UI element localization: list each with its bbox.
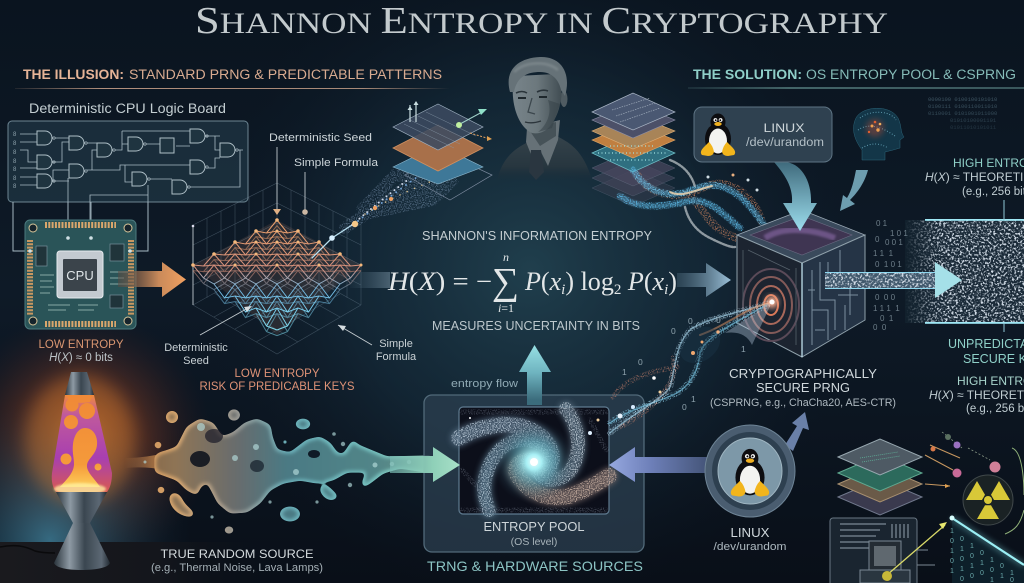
text: true random source xyxy=(151,547,323,574)
chart: hardware noise diagram xyxy=(830,432,1024,583)
entropy decay line with binary xyxy=(952,518,1024,583)
arrow: CPU to PRNG mesh xyxy=(118,262,186,297)
particle stream from mesh to layers xyxy=(312,172,455,258)
binary block top right: 0100111 0100110011010 xyxy=(928,103,997,110)
binary digits near the helix: 0 xyxy=(638,357,643,367)
chart: low entropy 3D mesh xyxy=(191,183,362,354)
arrow: lava flow to entropy pool xyxy=(390,447,460,482)
panel: high entropy noise output xyxy=(905,200,1024,332)
lava wax xyxy=(60,395,102,487)
chart: hardware noise diagram: 1 xyxy=(950,548,954,555)
Linux badge label: LINUX xyxy=(730,526,770,540)
wave: upper data ribbons into cube xyxy=(620,160,767,247)
chart: hardware noise diagram: 1 xyxy=(970,563,974,570)
galaxy xyxy=(459,407,609,514)
lamp cap xyxy=(65,372,94,395)
formula caption: MEASURES UNCERTAINTY IN BITS xyxy=(432,319,640,333)
CPU board xyxy=(13,202,148,329)
arrow: cube to output xyxy=(825,262,962,298)
title: SHANNON ENTROPY IN CRYPTOGRAPHY xyxy=(195,0,888,42)
arrow: formula to cube xyxy=(677,263,731,297)
panel: entropy pool: ENTROPY POOL xyxy=(484,520,585,534)
binary digits near the helix: 0 xyxy=(688,316,693,326)
binary block top right xyxy=(928,96,997,131)
hardware chip panel xyxy=(830,518,935,583)
formula: i xyxy=(664,282,668,298)
icon: Linux penguin xyxy=(701,114,735,156)
core spark in the cube xyxy=(766,296,778,308)
chart: hardware noise diagram: 0 xyxy=(950,558,954,565)
chart: hardware noise diagram: 1 xyxy=(960,546,964,553)
lamp glass xyxy=(52,395,112,492)
chart: hardware noise diagram: 0 xyxy=(950,538,954,545)
panel: logic gate circuit: 8 xyxy=(13,159,17,165)
formula: H(X) = − xyxy=(387,267,492,296)
Linux badge label: /dev/urandom xyxy=(714,541,786,553)
formula heading: SHANNON'S INFORMATION ENTROPY xyxy=(422,229,653,243)
panel: logic gate circuit: 8 xyxy=(13,141,17,147)
labels: deterministic seed and simple formula (lower) xyxy=(164,306,417,367)
binary digits near the helix: 1 xyxy=(741,344,746,354)
icon: brain head xyxy=(854,108,904,160)
portrait: Claude Shannon xyxy=(497,57,592,180)
low entropy risk label: LOW ENTROPY xyxy=(234,368,320,380)
panel: Linux /dev/urandom callout: /dev/urandom xyxy=(746,137,824,149)
binary digits around the noise block: 0 1 xyxy=(880,314,894,323)
chart: hardware noise diagram: 1 xyxy=(990,557,994,564)
panel: entropy pool: (OS level) xyxy=(511,536,557,548)
binary block top right: 01011010101011 xyxy=(950,124,997,131)
chart: hardware noise diagram: 0 xyxy=(960,556,964,563)
text: CSPRNG: (CSPRNG, e.g., ChaCha20, AES-CTR) xyxy=(710,397,896,409)
CPU label: CPU xyxy=(66,268,94,283)
arrow: brain to cube xyxy=(840,170,868,211)
labels: deterministic seed and simple formula (lower): Simple xyxy=(379,338,413,350)
chart: hardware noise diagram: 0 xyxy=(990,567,994,574)
Linux badge label xyxy=(714,526,786,553)
binary block top right: 0110001 0101001011000 xyxy=(928,110,997,117)
panel: entropy pool xyxy=(424,395,644,552)
formula: i=1 xyxy=(498,301,514,315)
panel: logic gate circuit: 8 xyxy=(13,176,17,182)
heading: the illusion: THE ILLUSION: xyxy=(23,67,124,82)
binary digits near the helix: 1 xyxy=(691,394,696,404)
grid walls xyxy=(193,183,361,354)
low entropy risk label: RISK OF PREDICABLE KEYS xyxy=(200,381,355,393)
mesh nodes xyxy=(191,218,362,267)
formula: n xyxy=(503,250,509,264)
binary digits near the helix xyxy=(622,315,746,412)
wave: lava to entropy flow blob xyxy=(125,410,433,534)
labels: deterministic seed and simple formula (lower): Deterministic xyxy=(164,342,228,354)
binary digits near the helix: 0 xyxy=(682,402,687,412)
labels: deterministic seed and simple formula (upper): Simple Formula xyxy=(294,157,379,169)
chart: hardware noise diagram: 0 xyxy=(980,550,984,557)
logic board caption: Deterministic CPU Logic Board xyxy=(29,101,226,116)
arrow: Linux callout to cube xyxy=(774,162,817,231)
icon: Linux badge xyxy=(705,412,809,517)
chart: hardware noise diagram: 0 xyxy=(970,573,974,580)
chart: hardware noise diagram: 0 xyxy=(970,553,974,560)
formula: ) log xyxy=(565,267,614,296)
binary digits around the noise block: 0 1 0 1 xyxy=(875,260,902,269)
power cord xyxy=(0,546,55,553)
panel: logic gate circuit: 8 xyxy=(13,184,17,190)
chart: hardware noise diagram: 1 xyxy=(1000,573,1004,580)
binary digits near the helix: 0 xyxy=(671,326,676,336)
chart: hardware noise diagram: 1 xyxy=(970,543,974,550)
heading: the solution: OS ENTROPY POOL & CSPRNG xyxy=(806,67,1016,82)
formula: ) xyxy=(668,267,677,296)
binary digits near the helix: 0 xyxy=(716,315,721,325)
low entropy CPU label: LOW ENTROPY xyxy=(38,339,124,351)
text: CSPRNG: CRYPTOGRAPHICALLY xyxy=(729,367,878,381)
low entropy risk label xyxy=(200,368,355,393)
panel: logic gate circuit xyxy=(8,121,248,251)
chart: hardware noise diagram: 1 xyxy=(960,566,964,573)
panel: logic gate circuit: 8 xyxy=(13,167,17,173)
low entropy CPU label xyxy=(38,339,124,364)
low entropy CPU label: H(X) ≈ 0 bits xyxy=(49,352,113,364)
formula: 2 xyxy=(614,282,621,298)
binary digits around the noise block: 1 1 1 1 xyxy=(873,304,900,313)
labels: deterministic seed and simple formula (upper) xyxy=(269,132,379,215)
icon: hardware layers xyxy=(838,439,922,515)
labels: deterministic seed and simple formula (lower): Seed xyxy=(183,355,209,367)
mesh lines xyxy=(193,220,361,336)
formula: P(x xyxy=(525,267,561,296)
formula: ∑ xyxy=(492,261,519,303)
panel: logic gate circuit: 8 xyxy=(13,132,17,138)
chart: hardware noise diagram: 1 xyxy=(950,528,954,535)
entropy flow label: entropy flow xyxy=(451,378,518,390)
icon: stacked layers left xyxy=(393,101,492,200)
labels: deterministic seed and simple formula (lower): Formula xyxy=(376,351,417,363)
text: CSPRNG xyxy=(710,367,896,409)
lamp base xyxy=(56,492,107,523)
text: high entropy lower xyxy=(929,374,1024,415)
heading: the solution: THE SOLUTION: xyxy=(693,67,802,82)
binary digits around the noise block: 0 0 1 xyxy=(885,238,903,247)
chart: hardware noise diagram: 0 xyxy=(960,576,964,583)
heading: the illusion: STANDARD PRNG & PREDICTABLE PATTERNS xyxy=(129,67,442,82)
binary digits around the noise block: 0 0 0 xyxy=(875,293,896,302)
mesh surface tint xyxy=(193,220,361,335)
icon: CSPRNG cube xyxy=(737,210,865,357)
binary digits around the noise block: 1 0 1 xyxy=(890,229,908,238)
binary digits around the noise block: 0 xyxy=(875,235,880,244)
wires xyxy=(13,131,243,251)
wave: lower helix from pool to cube xyxy=(610,302,772,433)
binary block top right: 01010100001101 xyxy=(950,117,997,124)
chart: hardware noise diagram: 1 xyxy=(980,560,984,567)
binary block top right: 0000100 0100100101010 xyxy=(928,96,997,103)
icon: radiation xyxy=(963,448,1024,534)
labels: deterministic seed and simple formula (upper): Deterministic Seed xyxy=(269,132,372,144)
text: true random source: TRUE RANDOM SOURCE xyxy=(160,547,314,561)
cube circuit face xyxy=(808,250,858,345)
heading: TRNG and hardware sources: TRNG & HARDWARE SOURCES xyxy=(427,558,643,574)
arrow: entropy flow upward xyxy=(519,345,551,405)
icon: stacked layers right xyxy=(592,93,675,206)
arrow: Linux to entropy pool xyxy=(609,447,715,482)
binary digits around the noise block: 0 0 xyxy=(873,323,887,332)
heading: the illusion xyxy=(15,67,450,89)
text: high entropy upper xyxy=(925,156,1024,198)
formula: i xyxy=(561,282,565,298)
galaxy arm haze xyxy=(459,409,609,510)
chart: hardware noise diagram: 0 xyxy=(980,570,984,577)
binary digits around the noise block: 0 1 xyxy=(876,219,888,228)
text: unpredictable secure keys xyxy=(948,337,1024,366)
panel: Linux /dev/urandom callout: LINUX xyxy=(764,121,804,135)
text: true random source: (e.g., Thermal Noise, Lava Lamps) xyxy=(151,562,323,574)
yellow pointer xyxy=(887,525,945,575)
chart: hardware noise diagram: 0 xyxy=(960,536,964,543)
text: CSPRNG: SECURE PRNG xyxy=(756,381,850,395)
formula: P(x xyxy=(628,267,664,296)
panel: logic gate circuit: 8 xyxy=(13,150,17,156)
formula xyxy=(387,250,677,315)
panel: Linux /dev/urandom callout xyxy=(694,107,832,162)
icon: lava lamp xyxy=(0,372,135,570)
heading: the solution xyxy=(688,67,1024,88)
chart: hardware noise diagram: 1 xyxy=(1010,570,1014,577)
galaxy star arms xyxy=(459,409,609,510)
cube face spiral xyxy=(743,250,799,345)
gates xyxy=(37,129,238,194)
binary digits around the noise block: 1 1 1 xyxy=(873,249,894,258)
binary digits around the noise block xyxy=(873,219,908,332)
chart: hardware noise diagram: 1 xyxy=(950,568,954,575)
binary digits near the helix: 1 xyxy=(622,367,627,377)
arrow: faint input to formula xyxy=(350,272,390,288)
chart: hardware noise diagram: 0 xyxy=(1000,563,1004,570)
